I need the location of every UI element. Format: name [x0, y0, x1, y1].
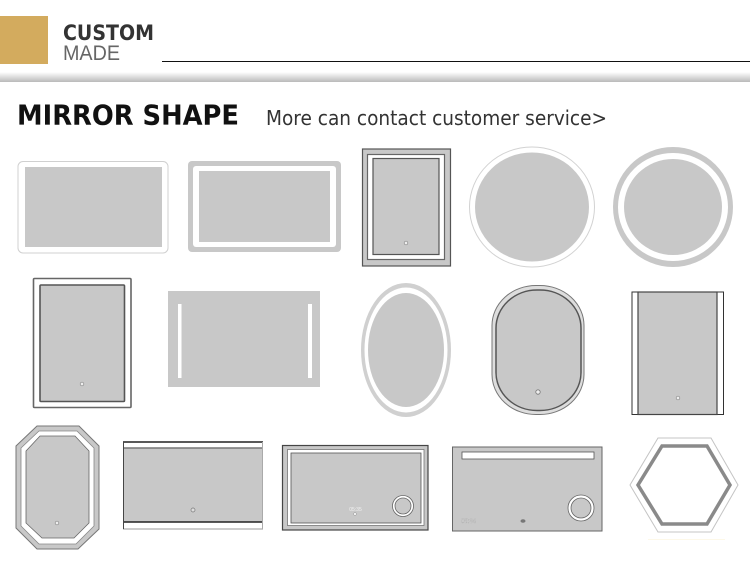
heading: custom: CUSTOM — [63, 21, 154, 45]
mirror 10: portrait with side light strips — [632, 292, 724, 414]
mirror 13: landscape with magnifier and clock — [282, 446, 428, 530]
mirror 9: capsule — [492, 286, 584, 414]
mirror 11: octagon — [16, 426, 99, 549]
gold square — [0, 16, 48, 64]
temperature text: 05:34 — [461, 519, 477, 525]
mirror 3: framed portrait — [362, 149, 450, 266]
header — [0, 16, 750, 82]
mirror 14: landscape with top light bar and magnifier — [452, 447, 602, 531]
mirror 6: portrait with white border — [34, 278, 131, 408]
clock text: 05:35 — [349, 507, 362, 513]
mirror 12: landscape with top and bottom light bands — [123, 442, 263, 529]
mirror 2: grey frame with light band — [188, 161, 341, 252]
mirror 5: round with grey frame — [613, 147, 733, 267]
mirror 15: hexagon — [630, 438, 738, 540]
mirror 1: rounded rectangle with white border — [18, 162, 168, 253]
section heading: MIRROR SHAPE — [17, 98, 239, 132]
mirror 8: oval — [361, 283, 451, 417]
mirror 4: round with white ring — [470, 147, 594, 267]
heading: made: MADE — [63, 42, 120, 65]
mirror 7: landscape with vertical light bars — [168, 291, 320, 387]
subheading: More can contact customer service> — [266, 106, 607, 130]
